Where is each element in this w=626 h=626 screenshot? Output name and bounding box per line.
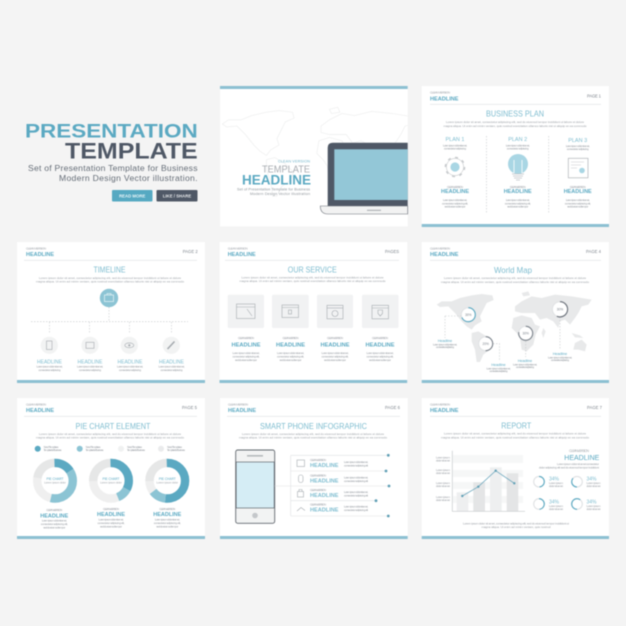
donut chart 1: Lorem ipsum dolor bbox=[44, 480, 66, 484]
donut chart 1: sed do eiusmod tempor bbox=[43, 526, 65, 530]
intro text: magna aliqua. Ut enim ad minim veniam, quis nostrud exercitation ullamco laboris nisi ut aliquip ex ea commodo bbox=[441, 280, 589, 284]
stat 3: dolor sit amet bbox=[549, 507, 563, 511]
column: plan 1: CLEAN VERSION bbox=[447, 185, 463, 189]
column: plan 3: PLAN 3 bbox=[568, 138, 587, 144]
step 3 bbox=[117, 337, 143, 372]
report summary: CLEAN VERSION bbox=[569, 449, 589, 453]
stat 2 bbox=[572, 476, 601, 488]
marker: asia: Lorem ipsum dolor sit amet, bbox=[548, 355, 572, 359]
step 2: HEADLINE bbox=[78, 360, 103, 366]
donut chart 3 bbox=[150, 463, 185, 528]
step 4 bbox=[158, 337, 185, 372]
panel: cover slide bbox=[220, 86, 418, 226]
donut chart 2: sed do eiusmod tempor bbox=[100, 524, 122, 528]
column: plan 1: PLAN 1 bbox=[446, 137, 464, 143]
service 3: CLEAN VERSION bbox=[327, 336, 343, 340]
step 1 bbox=[36, 337, 63, 372]
legend: Set of Templates bbox=[127, 445, 142, 449]
column: plan 1: HEADLINE bbox=[441, 189, 469, 195]
column: plan 2: Lorem ipsum dolor sit amet, bbox=[506, 198, 530, 202]
row 2: consectetur adipiscing elit bbox=[344, 479, 368, 483]
intro text: Lorem ipsum dolor sit amet, consectetur adipiscing elit, sed do eiusmod tempor incididunt ut labore et dolore bbox=[444, 276, 586, 280]
panel: report bbox=[422, 398, 609, 539]
row 4: HEADLINE bbox=[310, 508, 339, 514]
subtitle: Set of Presentation Template for Business bbox=[28, 163, 198, 173]
panel header: CLEAN VERSION bbox=[430, 91, 450, 95]
intro text bbox=[444, 120, 587, 128]
combo chart: dolor sit amet bbox=[436, 484, 450, 488]
marker: africa: 30% bbox=[523, 332, 529, 336]
service 2 bbox=[272, 295, 309, 362]
row 2: CLEAN VERSION bbox=[310, 474, 326, 478]
donut chart 3: consectetur adipiscing elit, bbox=[154, 521, 181, 525]
panel header: HEADLINE bbox=[228, 408, 256, 414]
panel header: CLEAN VERSION bbox=[26, 403, 46, 407]
heading: BUSINESS PLAN bbox=[486, 109, 544, 119]
column: plan 1: consectetur adipiscing bbox=[444, 146, 466, 150]
service 3: HEADLINE bbox=[320, 343, 350, 349]
column: plan 3: consectetur adipiscing elit, bbox=[565, 201, 591, 205]
column: plan 3: HEADLINE bbox=[564, 189, 592, 195]
heading: SMART PHONE INFOGRAPHIC bbox=[260, 421, 367, 431]
row 3: Lorem ipsum dolor sit amet, bbox=[344, 490, 368, 494]
legend: Template for Business bbox=[167, 448, 186, 452]
legend: Set of Templates bbox=[86, 445, 101, 449]
panel header: HEADLINE bbox=[430, 96, 459, 102]
step 4: Lorem ipsum dolor sit amet, bbox=[158, 365, 185, 369]
footer text: magna aliqua. Ut enim ad minim veniam, quis nostrud bbox=[482, 525, 551, 529]
marker: north america: consectetur adipiscing bbox=[436, 345, 454, 349]
service 3: consectetur adipiscing elit, bbox=[322, 354, 349, 358]
donut chart 2: consectetur adipiscing elit, bbox=[98, 521, 125, 525]
donut chart 2: HEADLINE bbox=[97, 512, 125, 518]
marker: asia: 30% bbox=[557, 308, 563, 312]
service 1: sed do eiusmod tempor bbox=[235, 358, 257, 362]
stat 1 bbox=[534, 476, 564, 488]
marker: africa: consectetur adipiscing bbox=[516, 365, 534, 369]
panel: our service bbox=[220, 242, 407, 383]
row 3: HEADLINE bbox=[310, 493, 339, 499]
service 1: consectetur adipiscing elit, bbox=[232, 354, 260, 358]
report summary: dolor adipiscing elit sed do eiusmod tempor incididunt bbox=[539, 466, 599, 470]
column: plan 3: sed do eiusmod tempor bbox=[567, 205, 588, 209]
marker: south america: Lorem ipsum dolor sit amet, bbox=[486, 366, 511, 370]
service 4 bbox=[362, 295, 398, 362]
donut chart 3: Lorem ipsum dolor sit amet, bbox=[155, 518, 180, 522]
column: plan 2: consectetur adipiscing elit, bbox=[505, 201, 531, 205]
marker: south america bbox=[479, 337, 511, 373]
marker: south america: consectetur adipiscing bbox=[490, 369, 508, 373]
row 2: HEADLINE bbox=[310, 478, 339, 484]
service 3 bbox=[317, 295, 353, 362]
panel header: PAGES bbox=[385, 249, 399, 254]
step 4: consectetur adipiscing bbox=[160, 368, 183, 372]
donut chart 2: Lorem ipsum dolor bbox=[100, 480, 122, 484]
button: read more bbox=[112, 190, 152, 202]
step 3: consectetur adipiscing bbox=[119, 368, 141, 372]
column: plan 2: Lorem ipsum dolor sit amet, bbox=[506, 144, 530, 148]
column: plan 3: Lorem ipsum dolor sit amet, bbox=[566, 144, 590, 148]
combo chart: dolor sit amet bbox=[436, 471, 450, 475]
panel header bbox=[227, 403, 401, 416]
stat 4 bbox=[572, 499, 601, 511]
heading: REPORT bbox=[501, 421, 532, 431]
service 4: CLEAN VERSION bbox=[372, 336, 388, 340]
heading: OUR SERVICE bbox=[288, 265, 337, 275]
marker: north america: Lorem ipsum dolor sit amet, bbox=[433, 342, 457, 346]
panel header: PAGE 4 bbox=[586, 249, 602, 254]
column: plan 3: CLEAN VERSION bbox=[570, 185, 586, 189]
service 1 bbox=[228, 295, 264, 362]
legend bbox=[35, 445, 186, 452]
intro text: Lorem ipsum dolor sit amet, consectetur adipiscing elit, sed do eiusmod tempor incididunt ut labore et dolore bbox=[242, 432, 384, 436]
column: plan 2 bbox=[504, 137, 532, 209]
intro text: Lorem ipsum dolor sit amet, consectetur adipiscing elit, sed do eiusmod tempor incididunt ut labore et dolore bbox=[444, 432, 586, 436]
panel header: PAGE 7 bbox=[587, 405, 603, 410]
stat 4: dolor sit amet bbox=[586, 507, 601, 511]
panel header: HEADLINE bbox=[430, 408, 459, 414]
panel header bbox=[430, 403, 603, 416]
step 2: consectetur adipiscing bbox=[79, 368, 101, 372]
panel: world map bbox=[422, 242, 609, 383]
heading: template: TEMPLATE bbox=[65, 138, 198, 163]
column: plan 3: consectetur adipiscing bbox=[567, 147, 589, 151]
column: plan 3 bbox=[564, 138, 592, 209]
panel header: PAGE 1 bbox=[587, 93, 602, 98]
stat 2: dolor sit amet bbox=[586, 484, 601, 488]
marker: africa: Headline bbox=[518, 359, 532, 363]
legend: Template for Business bbox=[44, 448, 62, 452]
marker: north america: 30% bbox=[465, 313, 472, 317]
combo chart: Lorem ipsum bbox=[436, 456, 450, 460]
donut chart 3: Lorem ipsum dolor bbox=[157, 480, 178, 484]
cover headline: TEMPLATE bbox=[262, 164, 310, 176]
service 1: HEADLINE bbox=[232, 343, 261, 349]
service 1: CLEAN VERSION bbox=[238, 336, 254, 340]
row 4 bbox=[297, 502, 368, 514]
panel: timeline bbox=[17, 242, 205, 383]
cover headline: Set of Presentation Template for Business bbox=[237, 188, 310, 192]
panel header bbox=[225, 247, 399, 260]
donut chart 3: PIE CHART bbox=[159, 477, 176, 481]
report summary bbox=[539, 449, 599, 470]
service 1: Lorem ipsum dolor sit amet, bbox=[232, 351, 260, 355]
panel header: HEADLINE bbox=[26, 408, 54, 414]
legend: Set of Templates bbox=[167, 445, 182, 449]
button: read more: READ MORE bbox=[119, 194, 145, 199]
intro text: magna aliqua. Ut enim ad minim veniam, quis nostrud exercitation ullamco laboris nisi ut aliquip ex ea commodo bbox=[441, 435, 589, 439]
icon: briefcase node bbox=[100, 289, 118, 307]
service 4: Lorem ipsum dolor sit amet, bbox=[366, 351, 394, 355]
panel header bbox=[24, 247, 198, 260]
panel header: HEADLINE bbox=[228, 252, 256, 258]
intro text: magna aliqua. Ut enim ad minim veniam, quis nostrud exercitation ullamco laboris nisi ut aliquip ex ea commodo bbox=[36, 436, 184, 440]
step 3: Lorem ipsum dolor sit amet, bbox=[117, 365, 143, 369]
cover headline: CLEAN VERSION bbox=[278, 159, 310, 163]
row 3: CLEAN VERSION bbox=[310, 488, 326, 492]
combo chart bbox=[436, 451, 525, 511]
intro text: Lorem ipsum dolor sit amet, consectetur adipiscing elit, sed do eiusmod tempor incididunt ut labore et dolore bbox=[242, 275, 384, 279]
intro text: magna aliqua. Ut enim ad minim veniam, quis nostrud exercitation ullamco laboris nisi ut aliquip ex ea commodo bbox=[240, 279, 386, 283]
donut chart 1: CLEAN VERSION bbox=[46, 508, 62, 512]
step 1: consectetur adipiscing bbox=[38, 368, 61, 372]
heading: TIMELINE bbox=[94, 265, 126, 275]
marker: north america bbox=[433, 308, 475, 349]
marker: south america: 20% bbox=[483, 342, 489, 346]
icon: laptop bbox=[320, 143, 408, 214]
row 4: CLEAN VERSION bbox=[310, 502, 326, 506]
intro text: magna aliqua. Ut enim ad minim veniam, quis nostrud exercitation ullamco laboris nisi ut aliquip ex ea commodo bbox=[444, 124, 587, 128]
intro text bbox=[441, 276, 589, 284]
column: plan 1: consectetur adipiscing elit, bbox=[442, 201, 468, 205]
donut chart 1 bbox=[37, 463, 73, 530]
panel header: PAGE 5 bbox=[182, 405, 198, 410]
stat 3: 34% bbox=[549, 500, 560, 506]
icon: phone bbox=[236, 450, 275, 523]
row 1: Lorem ipsum dolor sit amet, bbox=[344, 460, 368, 464]
column: plan 1: Lorem ipsum dolor sit amet, bbox=[443, 198, 467, 202]
column: plan 1: sed do eiusmod tempor bbox=[444, 205, 466, 209]
service 4: sed do eiusmod tempor bbox=[369, 358, 391, 362]
stat 2: Lorem ipsum bbox=[586, 481, 601, 485]
heading: presentation: PRESENTATION bbox=[25, 120, 198, 142]
panel header: HEADLINE bbox=[26, 252, 54, 258]
service 3: sed do eiusmod tempor bbox=[324, 358, 346, 362]
button: like / share bbox=[156, 190, 198, 202]
legend: Set of Templates bbox=[44, 445, 59, 449]
column: plan 2: CLEAN VERSION bbox=[510, 185, 526, 189]
panel: pie chart element bbox=[17, 398, 205, 539]
marker: africa bbox=[513, 326, 537, 369]
cover headline: HEADLINE bbox=[242, 173, 311, 188]
marker: asia: consectetur adipiscing bbox=[551, 358, 569, 362]
intro text bbox=[36, 276, 184, 284]
row 1 bbox=[297, 458, 368, 469]
step 4: HEADLINE bbox=[159, 360, 184, 366]
column: plan 2: PLAN 2 bbox=[508, 137, 527, 143]
combo chart: Lorem ipsum bbox=[436, 481, 450, 485]
stat 4: Lorem ipsum bbox=[586, 504, 601, 508]
step 1: HEADLINE bbox=[37, 360, 62, 366]
donut chart 2: Lorem ipsum dolor sit amet, bbox=[98, 518, 124, 522]
legend: Template for Business bbox=[86, 448, 104, 452]
intro text: Lorem ipsum dolor sit amet, consectetur adipiscing elit, sed do eiusmod tempor incididunt ut labore et dolore bbox=[446, 120, 584, 124]
column: plan 2: HEADLINE bbox=[504, 189, 532, 195]
panel header: HEADLINE bbox=[430, 252, 459, 258]
column: plan 2: consectetur adipiscing bbox=[507, 146, 529, 150]
step 2 bbox=[77, 337, 103, 372]
panel header bbox=[430, 247, 602, 260]
intro text: magna aliqua. Ut enim ad minim veniam, quis nostrud exercitation ullamco laboris nisi ut aliquip ex ea commodo bbox=[239, 436, 387, 440]
legend: Template for Business bbox=[127, 448, 146, 452]
donut chart 3: HEADLINE bbox=[153, 512, 181, 518]
subtitle bbox=[28, 163, 198, 183]
panel: smart phone infographic bbox=[220, 398, 408, 539]
panel header: PAGE 2 bbox=[183, 249, 198, 254]
intro text bbox=[441, 432, 589, 439]
panel header bbox=[24, 403, 198, 416]
world map bbox=[437, 291, 592, 362]
stat 3: Lorem ipsum bbox=[549, 504, 564, 508]
stat 1: dolor sit amet bbox=[549, 484, 563, 488]
panel: business plan bbox=[422, 86, 609, 227]
panel header: CLEAN VERSION bbox=[430, 403, 450, 407]
timeline connectors bbox=[31, 307, 188, 333]
column: plan 1: Lorem ipsum dolor sit amet, bbox=[443, 144, 467, 148]
row 4: Lorem ipsum dolor sit amet, bbox=[344, 504, 368, 508]
heading: World Map bbox=[494, 265, 532, 275]
row 1: HEADLINE bbox=[310, 463, 339, 469]
donut chart 1: HEADLINE bbox=[40, 514, 68, 520]
marker: asia bbox=[548, 302, 572, 362]
panel header: CLEAN VERSION bbox=[26, 247, 46, 251]
row 1: CLEAN VERSION bbox=[310, 458, 326, 462]
donut chart 2: CLEAN VERSION bbox=[103, 507, 119, 511]
subtitle: Modern Design Vector illustration. bbox=[59, 173, 198, 183]
row 1: consectetur adipiscing elit bbox=[344, 464, 368, 468]
service 2: consectetur adipiscing elit, bbox=[277, 354, 304, 358]
button: like / share: LIKE / SHARE bbox=[163, 194, 191, 199]
step 1: Lorem ipsum dolor sit amet, bbox=[36, 365, 63, 369]
stat 3 bbox=[534, 499, 564, 511]
panel header: PAGE 6 bbox=[385, 405, 401, 410]
service 3: Lorem ipsum dolor sit amet, bbox=[322, 351, 349, 355]
step 2: Lorem ipsum dolor sit amet, bbox=[77, 365, 103, 369]
cover headline bbox=[237, 159, 311, 196]
intro text: Lorem ipsum dolor sit amet, consectetur adipiscing elit, sed do eiusmod tempor incididunt ut labore et dolore bbox=[39, 432, 181, 436]
dividers bbox=[486, 136, 549, 214]
service 4: HEADLINE bbox=[366, 343, 395, 349]
icon: certificate bbox=[568, 158, 588, 178]
combo chart: Lorem ipsum bbox=[436, 468, 450, 472]
row 3 bbox=[298, 488, 368, 499]
marker: north america: Headline bbox=[438, 339, 452, 343]
stat 1: Lorem ipsum bbox=[549, 481, 564, 485]
stat 4: 34% bbox=[586, 500, 597, 506]
combo chart: dolor sit amet bbox=[436, 498, 450, 502]
column: plan 1 bbox=[441, 137, 469, 209]
stat 1: 34% bbox=[549, 477, 560, 483]
title block bbox=[25, 120, 198, 202]
icon: gear bbox=[445, 157, 465, 177]
row 3: consectetur adipiscing elit bbox=[344, 494, 368, 498]
cover headline: Modern Design Vector illustration bbox=[250, 192, 310, 196]
donut chart 3: CLEAN VERSION bbox=[159, 507, 175, 511]
stat 2: 34% bbox=[586, 477, 597, 483]
donut chart 1: Lorem ipsum dolor sit amet, bbox=[42, 518, 67, 522]
icon: light bulb bbox=[508, 154, 528, 180]
row 2 bbox=[298, 474, 368, 484]
row 2: Lorem ipsum dolor sit amet, bbox=[344, 476, 368, 480]
donut chart 1: PIE CHART bbox=[47, 477, 64, 481]
combo chart: dolor sit amet bbox=[436, 458, 450, 462]
panel header: CLEAN VERSION bbox=[228, 247, 248, 251]
intro text bbox=[239, 432, 387, 440]
footer text bbox=[463, 522, 569, 529]
service 2: HEADLINE bbox=[276, 343, 305, 349]
row 4: consectetur adipiscing elit bbox=[344, 508, 368, 512]
footer text: Lorem ipsum dolor sit amet, consectetur adipiscing elit, sed do eiusmod tempor incididunt ut bbox=[463, 522, 569, 526]
marker: asia: Headline bbox=[553, 352, 567, 356]
marker: south america: Headline bbox=[491, 363, 506, 367]
panel header bbox=[430, 91, 602, 104]
marker: africa: Lorem ipsum dolor sit amet, bbox=[513, 362, 537, 366]
combo chart: Lorem ipsum bbox=[436, 495, 450, 499]
intro text bbox=[240, 275, 386, 283]
service 2: sed do eiusmod tempor bbox=[280, 358, 302, 362]
service 4: consectetur adipiscing elit, bbox=[366, 354, 394, 358]
donut chart 2 bbox=[93, 463, 129, 528]
service 2: Lorem ipsum dolor sit amet, bbox=[277, 351, 304, 355]
intro text: magna aliqua. Ut enim ad minim veniam, quis nostrud exercitation ullamco laboris nisi ut aliquip ex ea commodo bbox=[36, 280, 184, 284]
intro text bbox=[36, 432, 184, 440]
connector lines bbox=[275, 454, 390, 517]
panel header: CLEAN VERSION bbox=[228, 403, 248, 407]
report summary: HEADLINE bbox=[564, 453, 599, 462]
world map outline bbox=[222, 108, 348, 196]
donut chart 2: PIE CHART bbox=[103, 477, 120, 481]
service 2: CLEAN VERSION bbox=[282, 336, 298, 340]
step 3: HEADLINE bbox=[118, 360, 143, 366]
donut chart 3: sed do eiusmod tempor bbox=[156, 524, 178, 528]
column: plan 3: Lorem ipsum dolor sit amet, bbox=[566, 198, 590, 202]
intro text: Lorem ipsum dolor sit amet, consectetur adipiscing elit, sed do eiusmod tempor incididunt ut labore et dolore bbox=[39, 276, 181, 280]
panel header: CLEAN VERSION bbox=[430, 247, 450, 251]
report summary: Lorem ipsum dolor sit amet consectetur bbox=[557, 462, 599, 466]
column: plan 2: sed do eiusmod tempor bbox=[507, 205, 528, 209]
heading: PIE CHART ELEMENT bbox=[76, 421, 151, 431]
donut chart 1: consectetur adipiscing elit, bbox=[41, 522, 68, 526]
